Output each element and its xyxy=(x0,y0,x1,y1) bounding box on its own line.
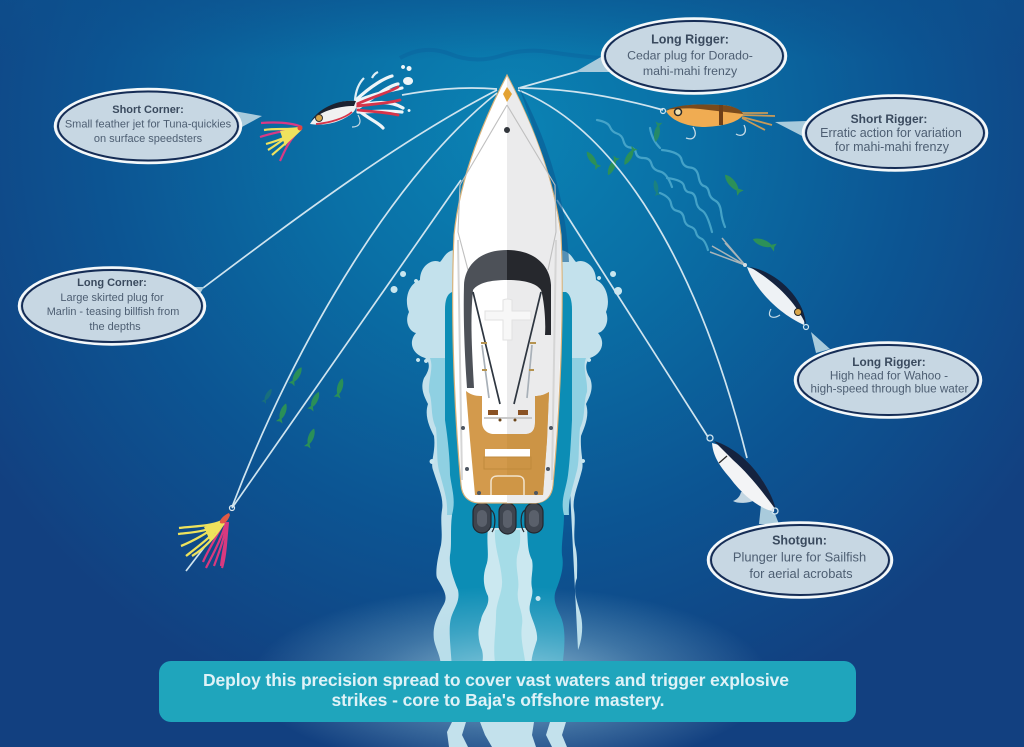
banner xyxy=(159,661,856,722)
callout bubble xyxy=(602,18,786,94)
line: long rigger to far-left lure xyxy=(232,93,497,507)
teak cockpit deck xyxy=(466,391,549,495)
fishing lines xyxy=(186,68,747,571)
lure back xyxy=(750,267,806,325)
pink tail xyxy=(260,122,302,161)
red head xyxy=(298,126,302,130)
plunger body xyxy=(712,443,774,512)
callout: long corner: Large skirted plug for xyxy=(60,292,164,304)
callout: shotgun: Plunger lure for Sailfish xyxy=(733,550,866,564)
line: tail past far-left lure xyxy=(186,545,206,571)
line: top long rigger xyxy=(519,68,590,88)
lure body xyxy=(747,267,804,325)
callout bubble xyxy=(19,268,205,344)
eye ring xyxy=(660,108,666,114)
callout text: Long Rigger: xyxy=(651,32,729,46)
callout bubble xyxy=(55,89,241,163)
ring xyxy=(230,506,234,510)
lure tail strands xyxy=(710,238,745,265)
line: shotgun left through stern side xyxy=(232,180,461,508)
lure body xyxy=(310,101,357,125)
wake: foam below banner xyxy=(447,722,567,747)
yellow strands xyxy=(264,128,301,155)
outrigger poles xyxy=(473,292,541,404)
tail ring xyxy=(772,508,778,514)
yellow tail xyxy=(280,127,301,146)
callout bubble xyxy=(803,96,987,170)
hull xyxy=(453,75,562,503)
boat shadow xyxy=(518,85,569,262)
plug band xyxy=(719,105,723,125)
tail strands xyxy=(742,113,775,130)
callout: short rigger: Erratic action for variation xyxy=(820,126,962,140)
transom door xyxy=(491,476,524,495)
callout: long corner: Marlin - teasing billfish from xyxy=(47,306,179,318)
callout: long rigger cedar plug: Cedar plug for Dorado- xyxy=(627,48,753,62)
bow gunwale lines xyxy=(458,105,556,270)
lure collar xyxy=(743,263,747,267)
wake: bubbles xyxy=(391,271,622,601)
wake: left foam xyxy=(407,250,470,668)
plug eye xyxy=(674,108,682,116)
wake: left foam shade xyxy=(429,358,456,515)
canopy dark half xyxy=(507,250,551,335)
outboard engines xyxy=(473,503,543,534)
bow anchor hatch xyxy=(504,127,510,133)
deck hatch xyxy=(485,449,530,457)
callout pointer xyxy=(811,332,830,353)
banner text: Deploy this precision spread to cover vast waters and trigger explosive xyxy=(203,670,789,690)
lure eye xyxy=(794,308,802,316)
line: short rigger xyxy=(518,88,663,110)
callout bubble xyxy=(708,522,892,598)
line: shotgun right xyxy=(557,200,708,437)
plug back xyxy=(666,105,743,114)
lure hook xyxy=(769,309,780,317)
callout: short rigger: for mahi-mahi frenzy xyxy=(835,140,950,154)
callout: shotgun xyxy=(708,522,892,598)
plunger band xyxy=(719,456,727,463)
canopy xyxy=(464,250,507,388)
callout: long rigger pointer shotgun xyxy=(759,505,779,524)
banner: strikes - core to Baja's offshore mastery. xyxy=(332,690,664,710)
callout: long rigger cedar plug xyxy=(575,18,786,94)
body back xyxy=(311,101,356,121)
line: long corner xyxy=(203,90,497,288)
callout: long rigger high head xyxy=(795,332,981,418)
boat wake xyxy=(250,250,770,747)
lure: shotgun plunger xyxy=(707,435,778,514)
spray dots xyxy=(401,65,413,112)
wake: water glow xyxy=(250,586,770,747)
cleats xyxy=(461,426,553,495)
eye xyxy=(316,114,322,122)
callout: long corner: the depths xyxy=(89,321,141,333)
helm cross xyxy=(485,299,531,340)
lead feathers xyxy=(355,72,378,100)
callout pointer xyxy=(192,287,204,297)
plunger back xyxy=(714,441,776,510)
wake: right foam xyxy=(558,250,608,650)
yellow fan xyxy=(204,520,224,541)
callout: short corner: on surface speedsters xyxy=(94,133,203,145)
wake: centre foam core xyxy=(494,530,526,668)
lure: high head wahoo xyxy=(710,238,808,330)
callout bubble xyxy=(795,342,981,418)
deck panel xyxy=(484,457,531,469)
lure: short corner feather jet xyxy=(260,65,413,161)
hook xyxy=(352,115,360,127)
callout: long rigger cedar plug: mahi-mahi frenzy xyxy=(643,64,738,78)
wake: centre foam xyxy=(478,528,537,668)
callout pointer xyxy=(775,121,806,138)
callout text: Short Corner: xyxy=(112,104,184,116)
pink skirts xyxy=(203,521,228,568)
callout text: Long Rigger: xyxy=(852,355,926,369)
line: short corner xyxy=(402,88,497,95)
hooks xyxy=(686,125,745,139)
callout text: Short Rigger: xyxy=(851,112,927,126)
callout: shotgun: for aerial acrobats xyxy=(749,566,853,581)
wake: inner teal channel xyxy=(445,292,572,668)
rings xyxy=(707,435,713,441)
lure ring xyxy=(804,324,808,330)
callout: short corner: Small feather jet for Tuna-quickies xyxy=(65,118,232,130)
deck right shade xyxy=(507,392,549,495)
callout: short corner xyxy=(55,89,262,163)
callout pointer xyxy=(575,54,612,72)
lure: long corner skirted plug xyxy=(178,506,234,568)
console gear xyxy=(488,410,498,415)
plug head xyxy=(220,513,230,524)
callout: long rigger high head: High head for Wahoo - xyxy=(830,368,948,382)
small fish: upper right school xyxy=(584,122,777,251)
body stripe xyxy=(316,112,352,124)
callout pointer xyxy=(234,111,262,128)
boat xyxy=(453,75,569,534)
feather skirt xyxy=(355,76,403,128)
callout: short rigger xyxy=(775,96,987,170)
plug body xyxy=(666,105,743,127)
callout text: Long Corner: xyxy=(77,277,147,289)
small fish: left school xyxy=(261,365,346,449)
hull shaded half xyxy=(507,76,561,503)
yellow skirts xyxy=(178,521,224,556)
lure: short rigger wooden plug xyxy=(660,105,775,139)
wake: right foam shade xyxy=(558,358,587,515)
ventral fin xyxy=(733,492,753,503)
red streamers xyxy=(357,87,400,115)
callout: long rigger high head: high-speed through blue water xyxy=(811,382,969,396)
decorative wavy water trails xyxy=(597,120,725,250)
banner background xyxy=(159,661,856,722)
callout text: Shotgun: xyxy=(772,534,827,548)
bow light xyxy=(503,87,512,102)
line: long rigger right xyxy=(518,90,747,458)
callout: long corner xyxy=(19,268,205,344)
